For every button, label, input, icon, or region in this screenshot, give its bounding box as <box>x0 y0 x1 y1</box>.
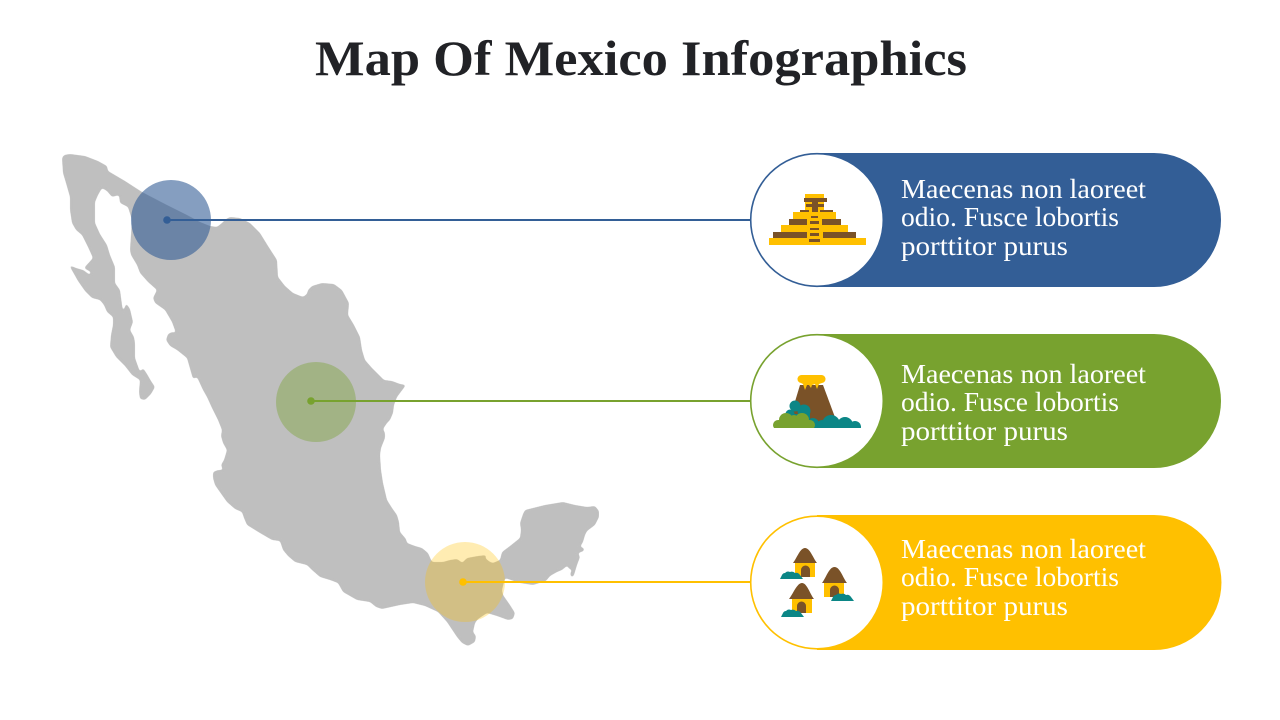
panel: green pill <box>751 334 1221 468</box>
text: blue pill: porttitor purus <box>901 231 1068 261</box>
text: blue pill: odio. Fusce lobortis <box>901 202 1119 232</box>
text: yellow pill: Maecenas non laoreet <box>901 534 1147 564</box>
icon: volcano <box>751 335 883 467</box>
text: green pill: odio. Fusce lobortis <box>901 387 1119 417</box>
icon: pyramid <box>751 154 883 286</box>
connector: yellow <box>459 578 751 586</box>
text: yellow pill: porttitor purus <box>901 591 1068 621</box>
connector: green <box>307 397 751 405</box>
marker circle: north <box>131 180 211 260</box>
icon: huts <box>751 516 883 649</box>
title: Map Of Mexico Infographics <box>315 30 967 86</box>
panel: blue pill <box>751 153 1221 287</box>
text: blue pill: Maecenas non laoreet <box>901 174 1147 204</box>
marker circle: south <box>425 542 505 622</box>
panel: yellow pill <box>751 515 1221 650</box>
map of Mexico <box>62 154 599 646</box>
text: green pill: porttitor purus <box>901 416 1068 446</box>
marker circle: centre <box>276 362 356 442</box>
text: green pill: Maecenas non laoreet <box>901 359 1147 389</box>
connector: blue <box>163 216 751 224</box>
text: yellow pill: odio. Fusce lobortis <box>901 562 1119 592</box>
